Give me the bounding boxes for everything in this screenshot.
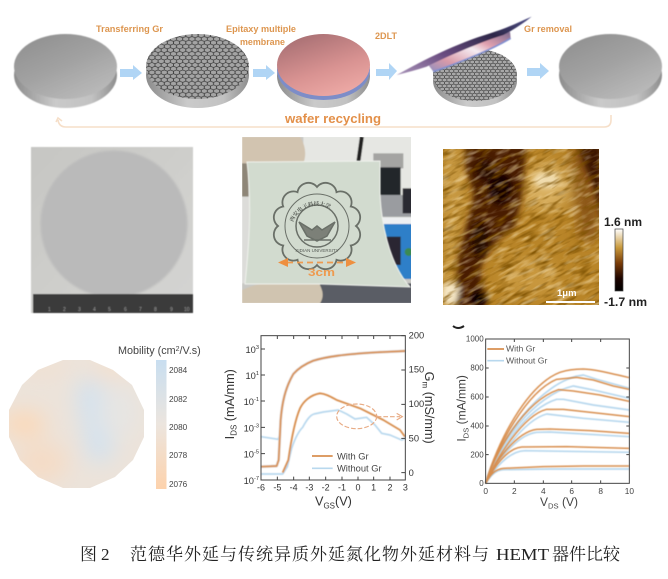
x axis ticks: -1 [338,483,346,493]
colour scale ticks: 2078 [169,451,188,460]
right axis label: G_m: m [420,382,429,389]
colour scale ticks: 2080 [169,423,188,432]
y axis ticks: 800 [470,364,484,373]
left axis ticks: 10 [245,371,256,381]
left axis ticks: 10 [244,397,254,407]
left axis ticks: 10 [244,423,254,433]
label: Epitaxy multiple membrane [226,24,296,47]
x axis ticks: 10 [625,486,634,496]
process flow: wafer recycling [14,17,662,127]
membrane sheet [245,161,410,287]
y axis label: I_DS: DS [230,425,239,436]
x axis ticks: 8 [598,486,603,496]
ruler: 1 [48,307,51,313]
x axis ticks [483,486,634,496]
AFM surface image [443,149,646,306]
left axis ticks: -1 [254,397,259,403]
arrow: step 4 [527,63,549,79]
axes frame [261,336,405,480]
wafer 2: graphene on substrate [146,34,249,108]
label: 2DLT: 2DLT [375,31,397,41]
map polygon [9,360,144,488]
wafer 1: bare substrate [14,34,117,108]
wafer disc [40,150,188,298]
x axis ticks: 2 [512,486,517,496]
x axis ticks: 0 [483,486,488,496]
figure caption [80,545,621,564]
x axis ticks: -4 [290,483,298,493]
mobility wafer map [9,346,200,489]
x axis ticks: -5 [273,483,281,493]
seal text: 西安电子科技大学 [289,201,331,222]
right axis label: G_m: (mS/mm) [422,388,436,444]
seal emblem [299,222,335,241]
dimension arrow: 3cm: 3cm [308,267,335,279]
ruler: 7 [139,307,142,313]
ruler: 2 [63,307,66,313]
x axis label: V_DS: DS [548,502,559,511]
curves with Gr [486,369,629,483]
dimension arrow: 3cm [278,258,356,276]
scale bar: 1μm [557,288,577,299]
label: -1.7 nm: -1.7 nm [604,295,647,309]
y axis ticks: 1000 [466,335,484,344]
figure caption: 图 [80,545,97,564]
colour scale ticks: 2076 [169,480,188,489]
right axis ticks: 0 [409,468,414,478]
x axis ticks: 0 [355,483,360,493]
figure caption: 范德华外延与传统异质外延氮化物外延材料与 [130,545,489,564]
legend: With Gr [506,344,535,354]
colour scale [156,360,166,489]
colour scale ticks: 2084 [169,366,188,375]
figure caption: 2 [101,545,110,564]
arrow: step 1 [120,65,142,80]
x axis ticks: 6 [569,486,574,496]
arrow: step 3 [376,63,397,80]
recycling loop line [56,115,611,127]
y axis ticks [466,335,484,488]
ruler: 8 [154,307,157,313]
arrow: step 2 [253,65,275,80]
left axis ticks: -5 [254,450,259,456]
figure caption: HEMT [496,545,550,564]
x axis label: V_DS: (V) [559,495,578,509]
axes frame [486,339,629,483]
x axis ticks: 3 [403,483,408,493]
label: wafer recycling: wafer recycling [284,111,381,126]
label: Gr removal: Gr removal [524,24,572,34]
legend [312,451,382,474]
right axis ticks: 50 [409,434,419,444]
left axis ticks: 10 [244,450,254,460]
wafer 3: epitaxial membrane [277,34,370,108]
wafer 4: substrate after lift-off [433,49,517,107]
right axis ticks: 200 [409,330,424,340]
label: 1.6 nm: 1.6 nm [604,215,642,229]
y axis label: I_DS: (mA/mm) [455,375,469,428]
x axis ticks [257,483,408,493]
right axis ticks: 100 [409,399,424,409]
left axis ticks: -7 [254,476,259,482]
curves [261,351,405,474]
ruler: 6 [124,307,127,313]
legend: With Gr [337,451,369,461]
AFM colour bar [615,229,623,291]
colour scale ticks [169,366,188,489]
x axis ticks: 1 [371,483,376,493]
x axis ticks: 2 [387,483,392,493]
stray panel letter remnant [453,326,464,328]
lifted membrane film [397,17,532,75]
left axis ticks: 1 [256,371,259,377]
legend: Without Gr [506,355,547,365]
AFM texture [443,149,599,305]
left axis ticks [244,345,259,486]
y axis ticks: 600 [470,393,484,402]
colour scale ticks: 2082 [169,395,188,404]
label: Epitaxy multiple membrane: Epitaxy multiple [226,24,296,34]
left axis ticks: -3 [254,423,259,429]
photo: flexible membrane with university seal [242,137,411,303]
photo: wafer on paper with ruler [31,147,193,313]
x axis label: V_DS: V [540,495,548,509]
lab background [242,137,413,303]
chart: output curves [455,335,634,511]
y axis ticks: 200 [470,450,484,459]
left axis ticks: 10 [244,476,254,486]
y axis label: I_DS: (mA/mm) [223,369,237,425]
x axis label: V_GS: GS [323,501,335,510]
ruler: 5 [108,307,111,313]
map title: Mobility (cm [118,345,176,357]
x axis label: V_GS: V [315,495,323,509]
y axis label: I_DS: DS [461,428,470,438]
label: Epitaxy multiple membrane: membrane [240,37,285,47]
right axis ticks: 150 [409,365,424,375]
x axis label: V_GS: (V) [335,495,352,509]
legend [487,344,547,365]
ruler: 4 [93,307,96,313]
y axis label: I_DS: I [455,438,469,442]
map title: /V.s) [180,345,201,357]
x axis ticks: -3 [305,483,313,493]
university seal [272,182,362,270]
left axis ticks: 10 [245,345,256,355]
label: Transferring Gr: Transferring Gr [96,24,163,34]
x axis ticks: -6 [257,483,265,493]
annotation: dashed ellipse and arrow [337,404,402,429]
y axis label: I_DS: I [223,436,237,439]
ruler: 10 [184,307,190,313]
right axis label: G_m: G [422,372,436,382]
x axis ticks: -2 [322,483,330,493]
legend: Without Gr [337,464,382,474]
figure caption: 器件比较 [552,545,621,564]
chart: transfer and transconductance curves [223,330,436,510]
seal text english: XIDIAN UNIVERSITY [295,248,339,253]
ruler [33,294,193,313]
scale bar [546,288,595,303]
ruler: 9 [170,307,173,313]
wafer 5: recycled substrate [559,34,662,108]
x axis ticks: 4 [541,486,546,496]
curves without Gr [486,375,629,483]
ruler: 3 [78,307,81,313]
right axis ticks [409,330,424,478]
y axis ticks: 0 [479,479,484,488]
left axis ticks: 3 [256,345,259,351]
map title: 2 [176,346,180,353]
y axis ticks: 400 [470,422,484,431]
